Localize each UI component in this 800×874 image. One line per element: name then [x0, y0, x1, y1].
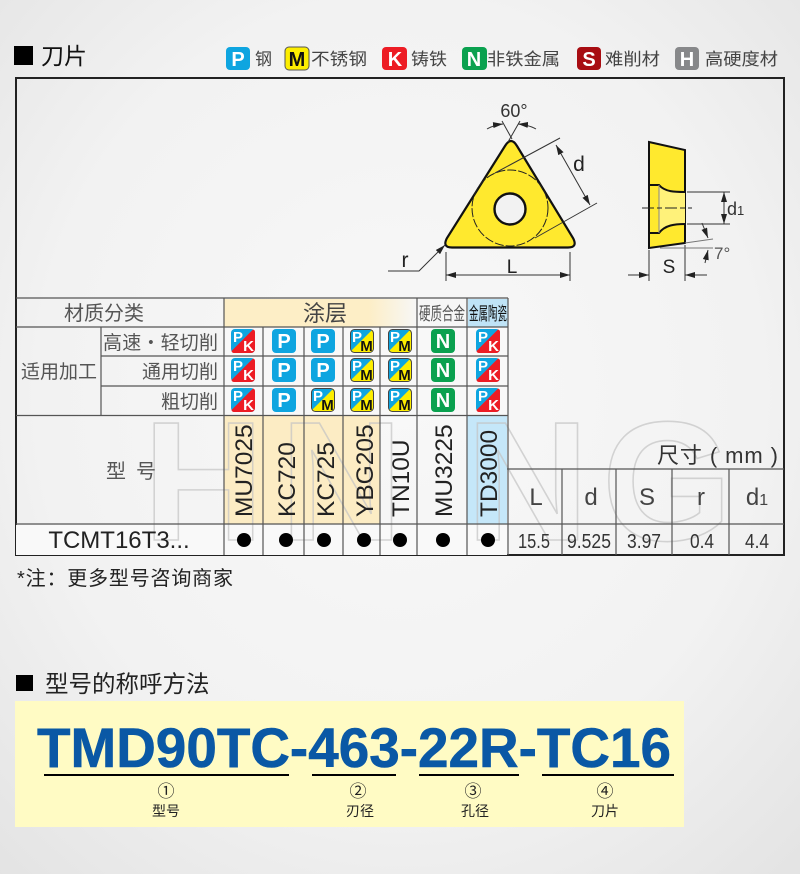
- table header labels: [21, 301, 507, 483]
- legend: material types: 难削材: [605, 50, 660, 69]
- dimension column headers: d: [584, 484, 598, 511]
- insert side view drawing: [628, 142, 744, 281]
- grade icons row 1: M: [360, 338, 373, 355]
- insert front view drawing: 60°: [500, 101, 528, 121]
- grade icons row 1: N: [436, 331, 450, 353]
- legend: material types: [226, 47, 778, 71]
- watermark letters: H: [143, 387, 264, 577]
- panel: model naming: 孔径: [461, 803, 489, 819]
- vertical grade names: TN10U: [388, 439, 415, 517]
- grade icons row 1: K: [243, 338, 254, 355]
- legend: material types: 不锈钢: [311, 50, 367, 69]
- model row: 0.4: [690, 531, 714, 553]
- grade icons row 2: [231, 358, 500, 384]
- grade icons row 1: [231, 329, 500, 355]
- grade icons row 3: N: [436, 390, 450, 412]
- grade icons row 3: M: [321, 397, 334, 414]
- model row: 3.97: [627, 531, 661, 553]
- table grid lines: [16, 298, 784, 555]
- vertical grade names: KC725: [313, 442, 340, 517]
- grade icons row 2: P: [390, 358, 400, 375]
- panel: model naming: 刃径: [346, 803, 374, 819]
- watermark letters: [143, 387, 732, 577]
- legend: material types: 非铁金属: [487, 50, 560, 69]
- grade icons row 2: M: [360, 367, 373, 384]
- dimension column headers: d1: [746, 484, 768, 511]
- dimension column headers: r: [697, 484, 705, 511]
- grade icons row 3: K: [488, 397, 499, 414]
- insert front view drawing: r: [402, 249, 408, 272]
- grade icons row 1: P: [277, 331, 291, 353]
- vertical grade names: MU7025: [231, 424, 258, 517]
- legend: material types: S: [582, 49, 596, 71]
- model row: 9.525: [567, 531, 611, 553]
- grade icons row 2: P: [233, 358, 243, 375]
- panel: insert table frame: [16, 78, 784, 555]
- legend: material types: 钢: [255, 50, 272, 69]
- grade icons row 3: [231, 388, 500, 414]
- model row: TCMT16T3...: [48, 527, 190, 554]
- heading: insert: 刀片: [41, 43, 87, 69]
- table header labels: 硬质合金: [419, 304, 465, 324]
- panel: model naming: ②: [350, 782, 366, 801]
- table header labels: 型 号: [106, 460, 156, 483]
- grade icons row 3: M: [398, 397, 411, 414]
- grade icons row 2: N: [436, 360, 450, 382]
- panel: model naming: ①: [158, 782, 174, 801]
- watermark letters: G: [602, 387, 732, 577]
- legend: material types: 高硬度材: [705, 50, 778, 69]
- panel: model naming: 型号: [152, 803, 180, 819]
- panel: model naming: 刀片: [591, 803, 619, 819]
- heading: insert: [14, 43, 87, 69]
- table header labels: 适用加工: [21, 361, 97, 383]
- grade icons row 1: P: [390, 329, 400, 346]
- vertical grade names: KC720: [274, 442, 301, 517]
- panel: model naming: TMD90TC-463-22R-TC16: [37, 716, 671, 779]
- grade icons row 3: P: [277, 390, 291, 412]
- panel: model naming: ③: [464, 782, 482, 801]
- insert side view drawing: S: [663, 257, 675, 278]
- grade icons row 2: M: [398, 367, 411, 384]
- grade icons row 1: P: [352, 329, 362, 346]
- model row: 15.5: [518, 531, 550, 553]
- vertical grade names: TD3000: [476, 430, 503, 517]
- legend: material types: P: [231, 49, 245, 71]
- grade icons row 1: P: [316, 331, 330, 353]
- dimension column headers: S: [639, 484, 655, 511]
- grade icons row 3: M: [360, 397, 373, 414]
- table header labels: 涂层: [303, 301, 347, 326]
- coloured column fills: [16, 299, 508, 555]
- table header labels: 金属陶瓷: [469, 304, 507, 324]
- legend: material types: H: [680, 49, 694, 71]
- legend: material types: M: [289, 49, 305, 71]
- grade icons row 3: P: [478, 388, 488, 405]
- grade icons row 3: P: [233, 388, 243, 405]
- grade icons row 2: P: [316, 360, 330, 382]
- watermark letters: N: [280, 387, 403, 577]
- grade icons row 2: P: [352, 358, 362, 375]
- panel: model naming: ④: [596, 782, 614, 801]
- grade icons row 1: M: [398, 338, 411, 355]
- grade icons row 3: P: [352, 388, 362, 405]
- grade icons row 2: P: [277, 360, 291, 382]
- grade icons row 1: K: [488, 338, 499, 355]
- legend: material types: K: [388, 49, 403, 71]
- table header labels: 粗切削: [161, 391, 218, 413]
- vertical grade names: [231, 424, 503, 517]
- insert front view drawing: L: [507, 257, 517, 278]
- grade icons row 3: P: [390, 388, 400, 405]
- insert side view drawing: d1: [727, 199, 744, 219]
- footnote: *注：更多型号咨询商家: [17, 567, 233, 590]
- legend: material types: N: [467, 49, 481, 71]
- grade icons row 2: P: [478, 358, 488, 375]
- panel: model naming: [15, 701, 684, 827]
- insert front view drawing: d: [573, 153, 585, 176]
- watermark letters: N: [466, 387, 589, 577]
- dimension column headers: L: [529, 484, 543, 511]
- insert side view drawing: 7°: [714, 244, 730, 263]
- legend: material types: 铸铁: [411, 50, 447, 69]
- dimension column headers: [529, 484, 768, 511]
- grade icons row 3: K: [243, 397, 254, 414]
- model row: [48, 527, 769, 554]
- table header labels: 高速・轻切削: [103, 332, 218, 354]
- grade icons row 1: P: [478, 329, 488, 346]
- grade icons row 2: K: [488, 367, 499, 384]
- table header labels: 材质分类: [64, 302, 144, 325]
- grade icons row 1: P: [233, 329, 243, 346]
- heading: model naming: 型号的称呼方法: [45, 671, 210, 697]
- dimensions heading: 尺寸 ( mm ): [657, 443, 778, 468]
- model row: 4.4: [745, 531, 769, 553]
- table header labels: 通用切削: [142, 361, 218, 383]
- grade icons row 3: P: [313, 388, 323, 405]
- vertical grade names: MU3225: [431, 424, 458, 517]
- grade icons row 2: K: [243, 367, 254, 384]
- insert front view drawing: [388, 101, 597, 281]
- vertical grade names: YBG205: [352, 424, 379, 517]
